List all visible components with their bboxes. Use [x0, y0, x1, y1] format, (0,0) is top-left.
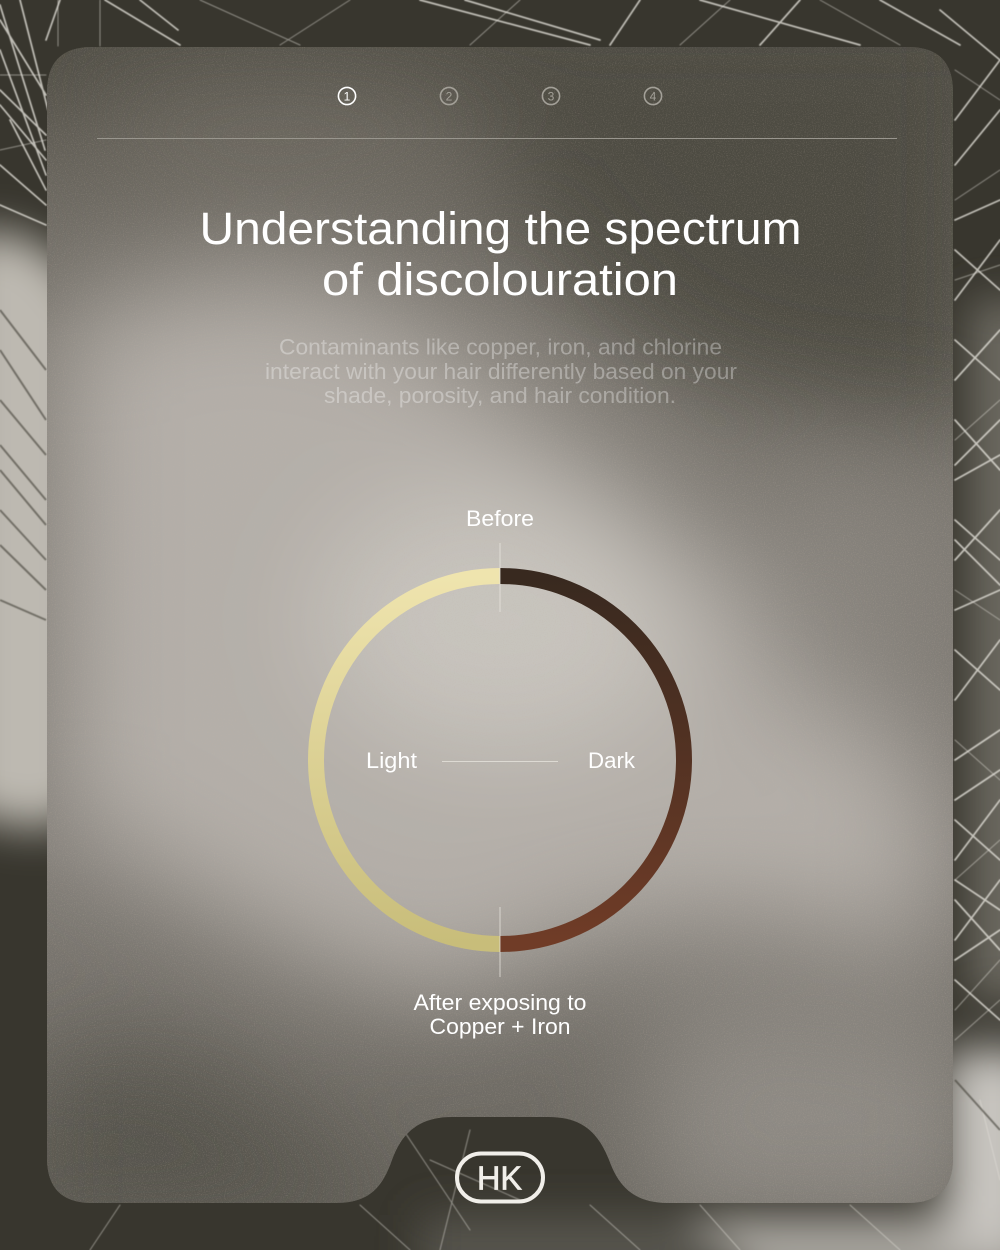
intro text: Contaminants like copper, iron, and chlorine [279, 334, 722, 360]
label: dark: Dark [588, 748, 636, 773]
logo: HK [457, 1154, 543, 1202]
arc: light hair [316, 576, 500, 944]
title [200, 203, 802, 305]
ring chart: light and dark hair colour change [316, 576, 684, 944]
axis lines [442, 543, 558, 977]
title: of discolouration [322, 254, 678, 305]
arc: dark hair [500, 576, 684, 944]
label: before: Before [466, 506, 534, 531]
step 2: 2 [446, 89, 453, 103]
label: after exposing [414, 990, 586, 1039]
label: after exposing: After exposing to [414, 990, 586, 1015]
step 4: 4 [650, 89, 657, 103]
step 1 active: 1 [344, 89, 351, 103]
label: light: Light [366, 748, 417, 773]
step 4 [644, 87, 662, 105]
step indicator [338, 87, 662, 105]
intro text: interact with your hair differently based on your [265, 359, 737, 384]
step 3: 3 [548, 89, 555, 103]
title: Understanding the spectrum [200, 203, 802, 254]
step 3 [542, 87, 560, 105]
label: after exposing: Copper + Iron [430, 1014, 570, 1039]
step 1 active [338, 87, 356, 105]
intro text: shade, porosity, and hair condition. [324, 383, 676, 408]
logo: HK: HK [477, 1160, 522, 1198]
intro text [265, 334, 737, 408]
step 2 [440, 87, 458, 105]
